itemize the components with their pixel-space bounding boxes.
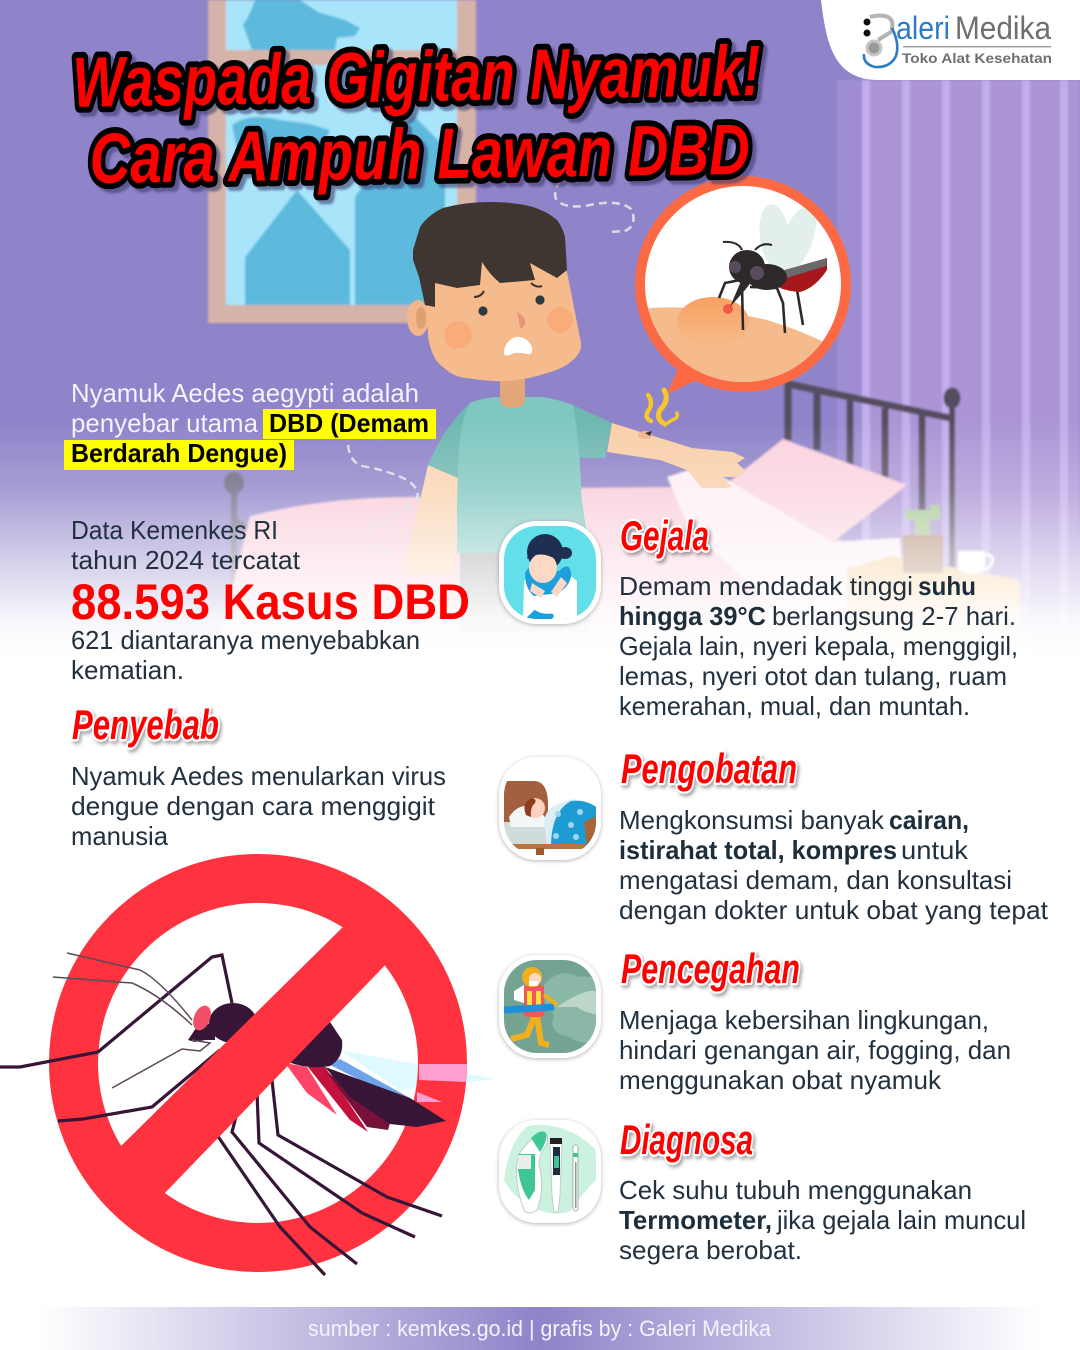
penyebab text xyxy=(71,761,446,851)
white fade overlay xyxy=(0,420,1080,655)
pengobatan text: Mengkonsumsi banyak xyxy=(619,805,885,835)
pencegahan text: Menjaga kebersihan lingkungan, xyxy=(619,1005,989,1035)
trousers xyxy=(460,553,590,633)
panel: pengobatan xyxy=(499,745,1049,925)
icon: shivering woman xyxy=(499,521,601,624)
pengobatan text: mengatasi demam, dan konsultasi xyxy=(619,865,1012,895)
title: Waspada Gigitan Nyamuk! xyxy=(72,32,761,123)
pengobatan text: istirahat total, kompres xyxy=(619,835,897,865)
title: Cara Ampuh Lawan DBD xyxy=(89,110,750,199)
headboard xyxy=(788,384,957,580)
window xyxy=(208,0,476,323)
logo wordmark xyxy=(896,10,1052,66)
left bed post and rail xyxy=(227,475,390,650)
heading: gejala: Gejala xyxy=(620,512,709,559)
brows xyxy=(474,283,542,297)
prohibition ring xyxy=(74,878,442,1248)
diagnosa text: Cek suhu tubuh menggunakan xyxy=(619,1175,972,1205)
diagnosa text: jika gejala lain muncul xyxy=(776,1205,1026,1235)
irritation squiggles xyxy=(647,390,677,425)
icon: thermometers xyxy=(499,1120,601,1223)
icon: no mosquito sign xyxy=(0,878,495,1275)
statistic block: 88.593 Kasus DBD xyxy=(71,574,470,630)
intro text block: DBD (Demam xyxy=(269,408,429,438)
bed xyxy=(205,487,900,700)
shirt xyxy=(428,397,612,553)
cup xyxy=(958,551,993,574)
statistic block: 621 diantaranya menyebabkan xyxy=(71,625,420,655)
panel: gejala xyxy=(499,512,1018,721)
left arm xyxy=(403,465,458,575)
gejala text: Gejala lain, nyeri kepala, menggigil, xyxy=(619,631,1018,661)
antennae and proboscis xyxy=(53,953,210,1088)
penyebab text: dengue dengan cara menggigit xyxy=(71,791,436,821)
footer: sumber : kemkes.go.id | grafis by : Galeri Medika xyxy=(308,1316,772,1341)
plant xyxy=(903,505,943,573)
pillow xyxy=(730,439,907,542)
pale wing rays xyxy=(340,1050,495,1090)
gejala text: kemerahan, mual, dan muntah. xyxy=(619,691,970,721)
icon: fogging worker xyxy=(499,955,601,1058)
gejala text: berlangsung 2-7 hari. xyxy=(772,601,1016,631)
background: bedroom scene xyxy=(0,0,1080,704)
callout tail xyxy=(666,365,696,395)
icon: magnified mosquito bite xyxy=(635,176,851,425)
pengobatan text: dengan dokter untuk obat yang tepat xyxy=(619,895,1049,925)
gejala text: suhu xyxy=(918,571,976,601)
pengobatan text: cairan, xyxy=(889,805,969,835)
diagnosa text: Termometer, xyxy=(619,1205,772,1235)
logo wordmark: Toko Alat Kesehatan xyxy=(902,50,1052,66)
gejala text xyxy=(619,571,1018,721)
intro text block: Berdarah Dengue) xyxy=(71,438,287,468)
title xyxy=(72,32,761,199)
mosquito wings and body xyxy=(188,1003,446,1132)
gejala text: lemas, nyeri otot dan tulang, ruam xyxy=(619,661,1007,691)
bedside table xyxy=(847,556,1020,700)
statistic block: Data Kemenkes RI xyxy=(71,515,278,545)
pencegahan text xyxy=(619,1005,1011,1095)
pengobatan text: untuk xyxy=(901,835,969,865)
hair xyxy=(413,202,567,307)
statistic block xyxy=(71,515,470,685)
tiny mosquito xyxy=(645,431,652,436)
logo wordmark: Medika xyxy=(955,10,1051,46)
bite mark xyxy=(638,431,652,439)
nose xyxy=(517,312,525,328)
penyebab text: Nyamuk Aedes menularkan virus xyxy=(71,761,446,791)
panel: pencegahan xyxy=(499,945,1011,1095)
icon: person resting in bed xyxy=(499,757,601,860)
flight path top xyxy=(555,180,633,232)
heading: penyebab: Penyebab xyxy=(72,701,219,748)
neck xyxy=(500,378,525,408)
face xyxy=(425,253,581,381)
gejala text: hingga 39°C xyxy=(619,601,766,631)
flight path left xyxy=(348,445,418,552)
prohibition bar xyxy=(115,920,392,1198)
statistic block: kematian. xyxy=(71,655,184,685)
diagnosa text: segera berobat. xyxy=(619,1235,802,1265)
pengobatan text xyxy=(619,805,1049,925)
right arm and hand xyxy=(607,423,745,488)
curtain xyxy=(837,80,1080,700)
sheet xyxy=(667,466,905,610)
panel: penyebab xyxy=(71,701,446,851)
diagnosa text xyxy=(619,1175,1026,1265)
logo panel xyxy=(821,0,1080,80)
gejala text: Demam mendadak tinggi xyxy=(619,571,913,601)
ear xyxy=(407,300,429,336)
boy xyxy=(348,202,745,633)
icon: stethoscope xyxy=(864,16,897,67)
heading: pengobatan: Pengobatan xyxy=(621,745,797,792)
footer xyxy=(40,1307,1040,1350)
legs xyxy=(0,955,442,1275)
mosquito xyxy=(719,242,827,333)
pencegahan text: hindari genangan air, fogging, dan xyxy=(619,1035,1011,1065)
heading: pencegahan: Pencegahan xyxy=(621,945,800,992)
skin xyxy=(648,307,822,382)
heading: diagnosa: Diagnosa xyxy=(620,1116,753,1163)
statistic block: tahun 2024 tercatat xyxy=(71,545,301,575)
intro text block: Nyamuk Aedes aegypti adalah xyxy=(71,378,419,408)
intro text block xyxy=(64,378,436,470)
mouth xyxy=(504,337,532,356)
intro text block: penyebar utama xyxy=(71,408,259,438)
pencegahan text: menggunakan obat nyamuk xyxy=(619,1065,942,1095)
eyes xyxy=(478,295,545,316)
cheeks xyxy=(444,321,472,349)
penyebab text: manusia xyxy=(71,821,169,851)
panel: diagnosa xyxy=(499,1116,1026,1265)
wings xyxy=(760,204,816,270)
logo wordmark: aleri xyxy=(896,10,950,46)
